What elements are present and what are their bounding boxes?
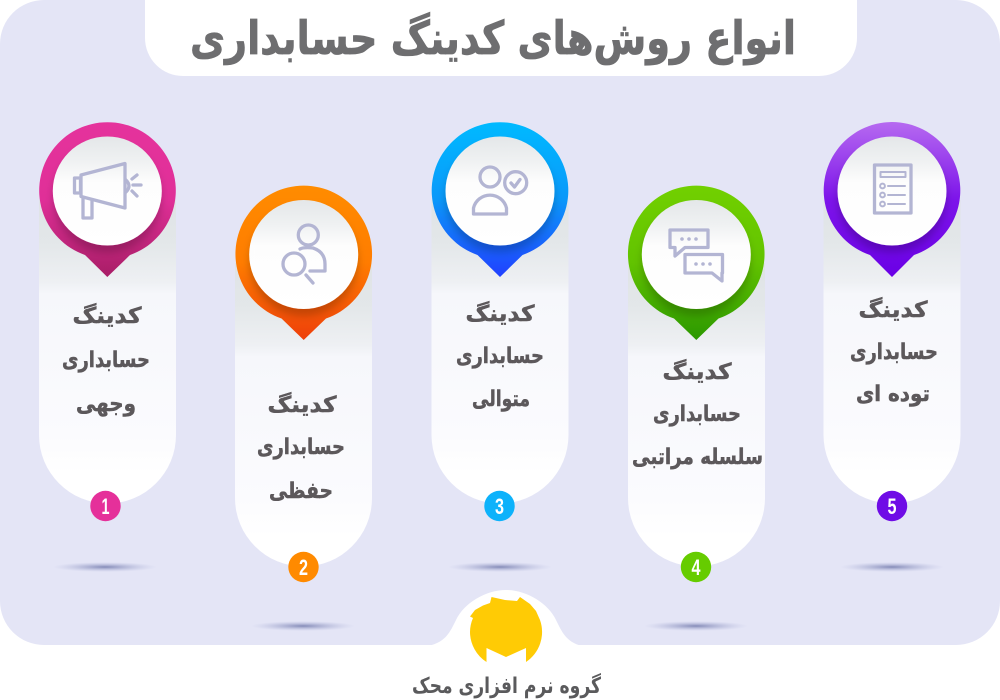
pin 5 <box>824 122 960 277</box>
text: card 4 label: سلسله مراتبی <box>632 445 763 470</box>
number badge 2: 2 <box>299 555 308 580</box>
text: card 1 label <box>62 302 150 417</box>
text: card 5 label: کدینگ <box>858 296 928 323</box>
shadow 5 <box>840 562 944 572</box>
inner circle 1 <box>53 136 162 246</box>
number badge 1 <box>90 491 121 521</box>
text: card 4 label: کدینگ <box>662 358 732 385</box>
text: card 1 label: وجهی <box>76 392 136 417</box>
card body 3 <box>432 200 568 503</box>
card body 4 <box>628 263 765 566</box>
number badge 3: 3 <box>495 494 504 519</box>
card body 1 <box>39 200 176 503</box>
panel: card 1 <box>39 122 176 572</box>
pin 2 <box>235 186 372 340</box>
text: card 1 label: کدینگ <box>72 302 142 329</box>
inner circle 2 <box>249 200 358 309</box>
icon: yellow logo mark <box>470 597 542 662</box>
panel: card 3 <box>432 122 568 572</box>
text: card 4 label <box>632 358 763 470</box>
panel: card 5 <box>824 122 960 572</box>
pin 1 <box>39 122 176 277</box>
icon: megaphone <box>74 164 141 218</box>
icon: chat bubbles <box>670 230 722 281</box>
inner circle 5 <box>838 136 946 246</box>
text: card 3 label <box>456 300 544 412</box>
pin 4 <box>628 186 765 340</box>
text: card 2 label: حسابداری <box>257 435 345 460</box>
title tab <box>145 0 857 76</box>
text: card 2 label <box>257 391 345 504</box>
card body 5 <box>824 200 960 503</box>
text: card 2 label: کدینگ <box>268 391 337 418</box>
inner circle 3 <box>446 136 554 246</box>
logo <box>412 590 601 699</box>
icon: person search <box>283 225 325 283</box>
number badge 4 <box>681 552 711 582</box>
number badge 3 <box>484 491 515 521</box>
icon: user check <box>474 167 527 214</box>
shadow 2 <box>251 621 355 631</box>
pin 3 <box>432 122 568 277</box>
text: card 3 label: حسابداری <box>456 344 544 369</box>
panel: card 4 <box>628 186 765 631</box>
title: انواع روش‌های کدینگ حسابداری <box>190 11 796 65</box>
shadow 4 <box>644 621 748 631</box>
white hump <box>428 590 582 646</box>
inner circle 4 <box>642 200 751 309</box>
text: card 3 label: کدینگ <box>466 300 535 327</box>
text: card 5 label: حسابداری <box>850 340 938 365</box>
number badge 5: 5 <box>888 494 896 519</box>
text: card 4 label: حسابداری <box>653 402 741 427</box>
icon: document list <box>874 165 911 213</box>
number badge 5 <box>877 491 907 521</box>
panel: card 2 <box>235 186 372 631</box>
text: card 5 label <box>850 296 938 407</box>
text: card 3 label: متوالی <box>472 387 530 412</box>
text: logo caption: گروه نرم افزاری محک <box>412 672 601 699</box>
text: card 5 label: توده ای <box>856 382 930 407</box>
number badge 1: 1 <box>102 494 110 519</box>
card body 2 <box>235 263 372 566</box>
number badge 4: 4 <box>692 555 701 580</box>
shadow 1 <box>53 562 157 572</box>
number badge 2 <box>288 552 319 582</box>
text: card 2 label: حفظی <box>269 479 333 504</box>
shadow 3 <box>448 562 552 572</box>
text: card 1 label: حسابداری <box>62 348 150 373</box>
